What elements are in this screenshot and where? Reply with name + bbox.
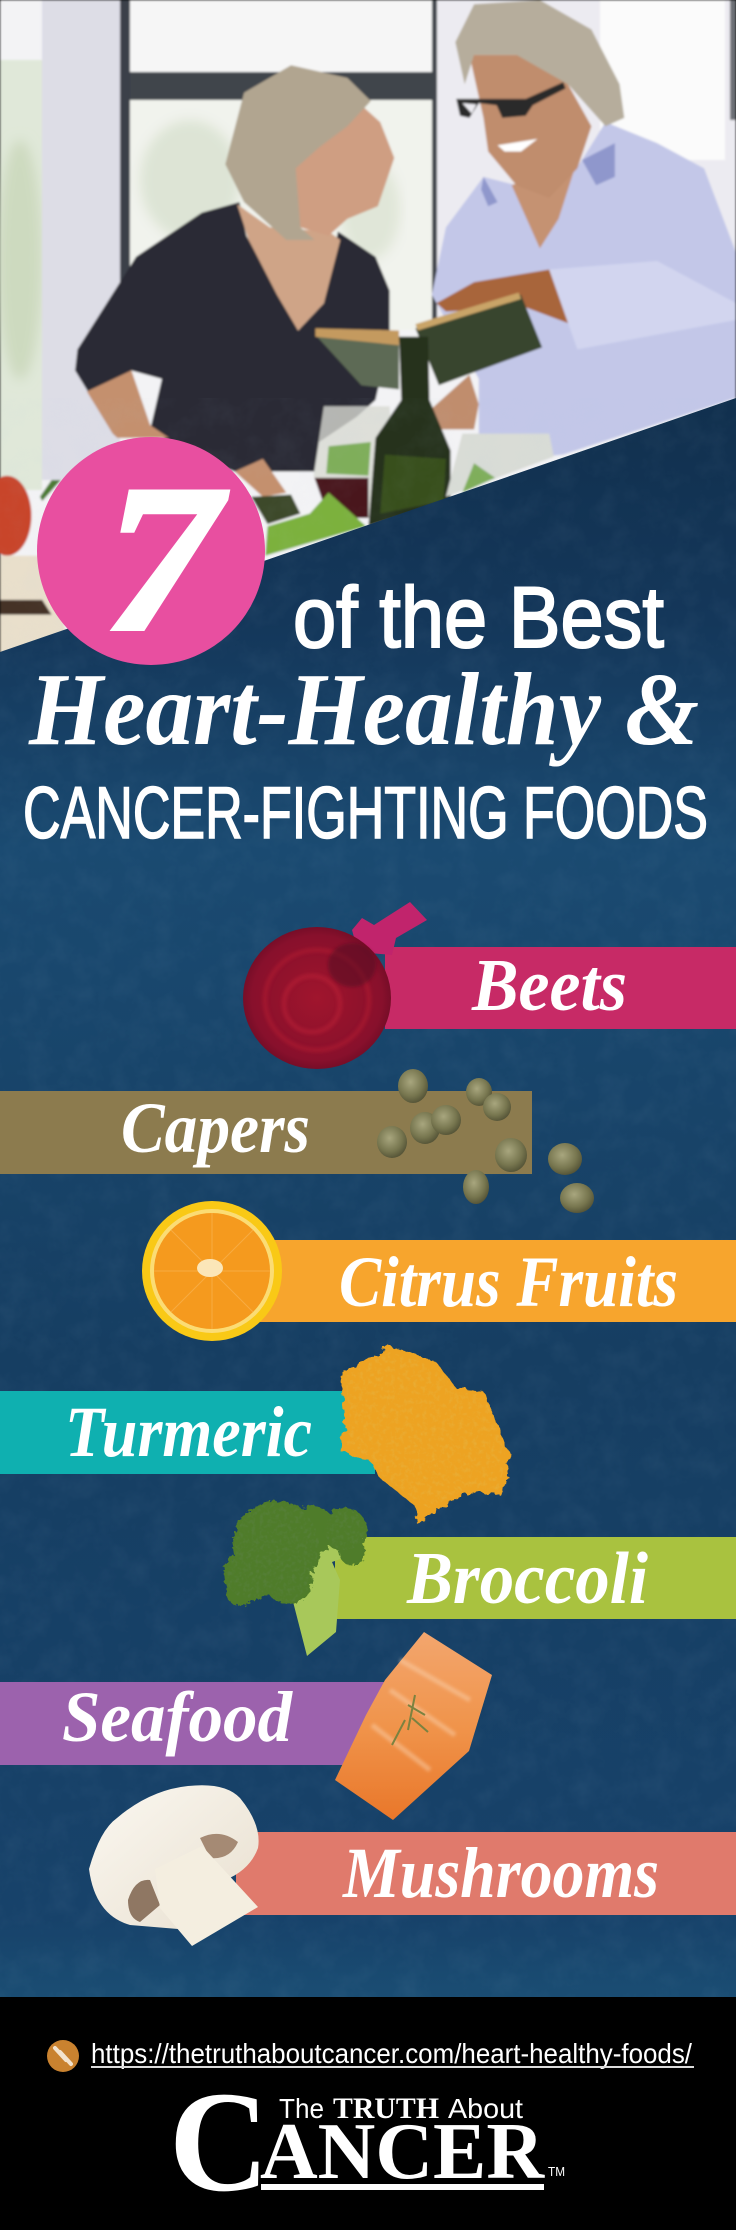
book xyxy=(315,293,542,389)
item: mushrooms xyxy=(89,1785,736,1946)
item: turmeric xyxy=(0,1346,510,1524)
man xyxy=(427,0,736,463)
item: capers xyxy=(0,1069,594,1213)
pink number badge xyxy=(37,437,265,675)
title: of the Best xyxy=(293,570,664,666)
logo: ANCER xyxy=(260,2108,545,2196)
item: mushrooms: Mushrooms xyxy=(342,1833,659,1913)
icon: link xyxy=(47,2040,79,2072)
item: citrus fruits xyxy=(142,1201,736,1341)
item: broccoli xyxy=(224,1501,736,1656)
woman xyxy=(75,65,394,497)
item: capers: Capers xyxy=(121,1088,310,1168)
logo: About xyxy=(448,2093,523,2124)
kitchen photo xyxy=(0,0,736,680)
item: beets xyxy=(243,902,736,1069)
logo: TRUTH xyxy=(333,2092,439,2125)
navy diagonal panel xyxy=(0,398,736,1998)
item: turmeric: Turmeric xyxy=(65,1392,312,1472)
pink number badge: 7 xyxy=(104,443,228,675)
source url: https://thetruthaboutcancer.com/heart-healthy-foods/ xyxy=(91,2038,692,2069)
item: seafood: Seafood xyxy=(62,1677,293,1757)
logo: The xyxy=(279,2093,324,2124)
item: beets: Beets xyxy=(471,945,627,1027)
logo xyxy=(169,2063,565,2222)
item: seafood xyxy=(0,1632,492,1820)
wine and vegetables xyxy=(0,337,554,657)
logo: TM xyxy=(548,2164,565,2179)
logo: C xyxy=(169,2063,269,2222)
title xyxy=(23,570,708,854)
footer band xyxy=(0,1997,736,2230)
item: broccoli: Broccoli xyxy=(406,1538,648,1620)
item: citrus fruits: Citrus Fruits xyxy=(339,1242,678,1322)
